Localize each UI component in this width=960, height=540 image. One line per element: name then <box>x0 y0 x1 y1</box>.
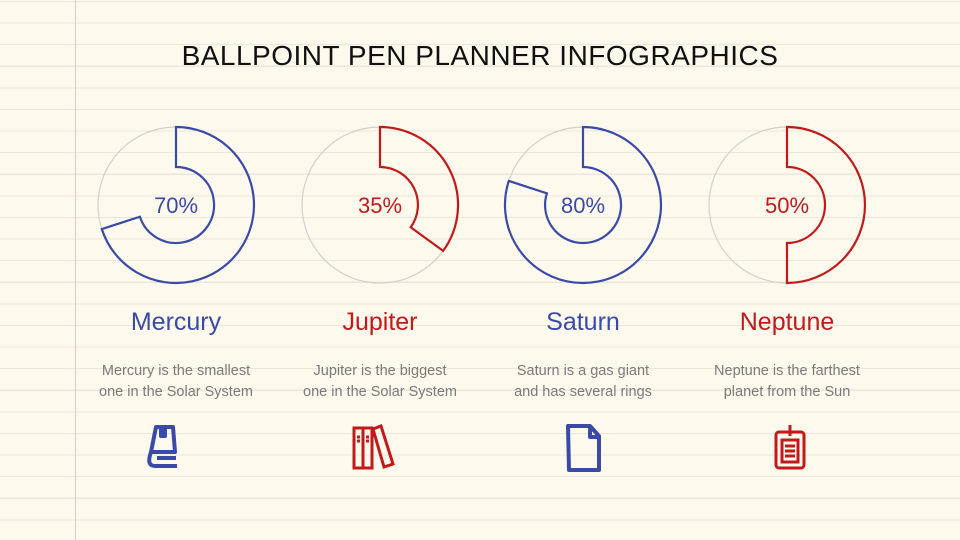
chart: jupiter 35%: 35% <box>358 193 402 218</box>
chart: neptune 50%: 50% <box>765 193 809 218</box>
chart: mercury 70%: 70% <box>154 193 198 218</box>
text: Jupiter is the biggest <box>314 363 446 379</box>
text: Saturn is a gas giant and has several rings <box>514 363 652 400</box>
text: Jupiter <box>342 308 418 336</box>
icon: book <box>149 427 177 466</box>
text: Mercury <box>131 308 221 336</box>
column: saturn <box>514 308 652 400</box>
text: Mercury is the smallest one in the Solar System <box>99 363 253 400</box>
chart: saturn 80% <box>505 127 661 283</box>
text: Neptune is the farthest planet from the Sun <box>714 363 860 400</box>
column: neptune <box>714 308 860 400</box>
column: mercury <box>99 308 253 400</box>
chart: saturn 80%: 80% <box>561 193 605 218</box>
chart: neptune 50% <box>709 127 865 283</box>
icon: document <box>568 426 599 470</box>
text: Saturn <box>546 308 620 336</box>
title: BALLPOINT PEN PLANNER INFOGRAPHICS <box>182 40 778 71</box>
chart: jupiter 35% <box>302 127 458 283</box>
text: Neptune <box>740 308 834 336</box>
text: one in the Solar System <box>303 384 457 400</box>
column: jupiter <box>303 308 457 400</box>
icon: clipboard <box>776 425 804 468</box>
icon: binders <box>354 426 393 468</box>
chart: mercury 70% <box>98 127 254 283</box>
